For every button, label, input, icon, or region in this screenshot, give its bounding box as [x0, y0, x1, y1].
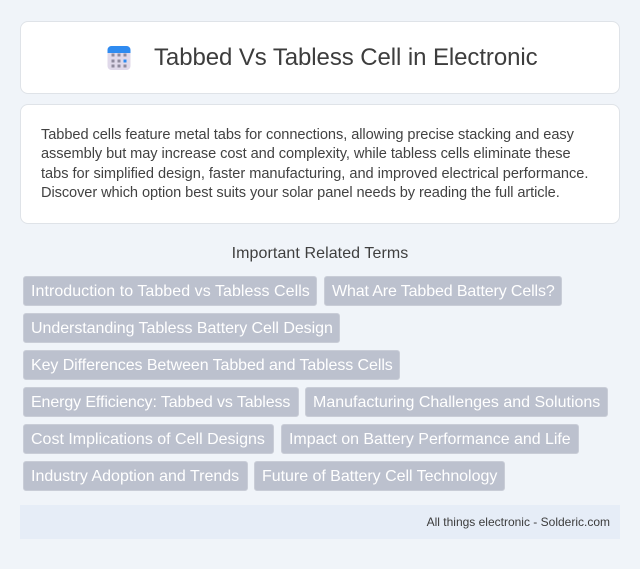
chip: Future of Battery Cell Technology — [262, 468, 497, 485]
chip: What Are Tabbed Battery Cells? — [332, 283, 555, 300]
description text: Discover which option best suits your solar panel needs by reading the full article. — [41, 185, 560, 201]
panel: description — [20, 104, 620, 224]
chip — [23, 424, 274, 454]
related terms chips — [23, 276, 608, 491]
chip: Key Differences Between Tabbed and Tabless Cells — [31, 357, 393, 374]
description text: assembly but may increase cost and complexity, while tabless cells eliminate these — [41, 146, 571, 162]
chip — [281, 424, 579, 454]
chip: Cost Implications of Cell Designs — [31, 431, 265, 448]
heading: related terms: Important Related Terms — [232, 245, 408, 262]
chip — [23, 313, 340, 343]
icon: calendar — [108, 46, 130, 70]
header panel — [20, 21, 620, 94]
chip: Understanding Tabless Battery Cell Design — [31, 320, 333, 337]
title: Tabbed Vs Tabless Cell in Electronic — [154, 44, 538, 71]
chip: Industry Adoption and Trends — [31, 468, 239, 485]
chip — [305, 387, 608, 417]
chip — [23, 350, 400, 380]
chip: Impact on Battery Performance and Life — [289, 431, 571, 448]
chip: Energy Efficiency: Tabbed vs Tabless — [31, 394, 290, 411]
description text: Tabbed cells feature metal tabs for connections, allowing precise stacking and easy — [41, 127, 574, 143]
chip: Manufacturing Challenges and Solutions — [313, 394, 600, 411]
chip — [23, 276, 317, 306]
footer — [20, 505, 620, 539]
chip — [23, 387, 299, 417]
chip — [254, 461, 505, 491]
chip — [324, 276, 562, 306]
chip — [23, 461, 248, 491]
description text: tabs for simplified design, faster manufacturing, and improved electrical performance. — [41, 166, 588, 182]
description text — [41, 127, 588, 201]
footer: All things electronic - Solderic.com — [427, 515, 610, 529]
chip: Introduction to Tabbed vs Tabless Cells — [31, 283, 310, 300]
